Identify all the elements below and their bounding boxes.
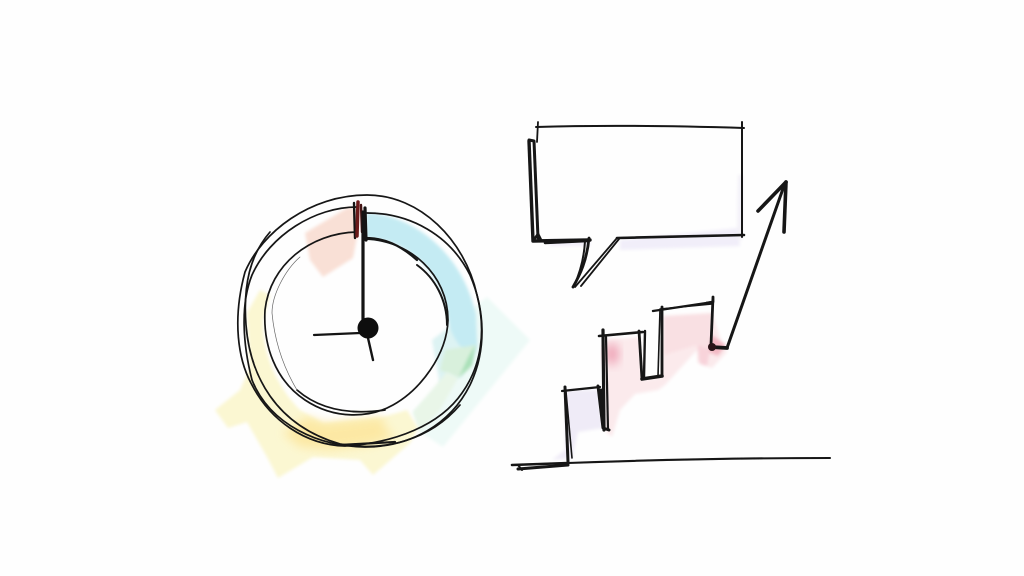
watercolor: pale yellow band <box>215 290 418 478</box>
bubble outline <box>529 122 744 287</box>
watercolor: pale cyan patch <box>413 297 530 447</box>
blot at arrow base <box>708 343 716 351</box>
rising step chart <box>512 182 830 470</box>
wash: lavender first step <box>552 390 603 460</box>
clock outer strokes <box>238 195 482 447</box>
clock inner strokes <box>265 232 448 415</box>
step line <box>562 297 727 462</box>
watercolor: red segment <box>305 207 360 277</box>
watercolor: green core <box>459 345 475 377</box>
arrow <box>727 182 786 348</box>
watercolor: golden yellow band <box>283 417 395 450</box>
speech bubble <box>529 122 744 287</box>
watercolor: blue ring segment <box>366 213 477 360</box>
wash: dark pink blot <box>605 343 619 365</box>
clock top ticks <box>354 202 366 240</box>
clock center hub <box>358 318 378 338</box>
wash: pink steps <box>606 313 727 437</box>
watercolor: pale green lower band <box>413 372 458 432</box>
baseline axis <box>512 458 830 470</box>
bubble wash <box>548 175 743 250</box>
clock hands <box>314 212 373 360</box>
clock illustration <box>215 195 530 478</box>
watercolor: green overlap <box>440 345 476 378</box>
